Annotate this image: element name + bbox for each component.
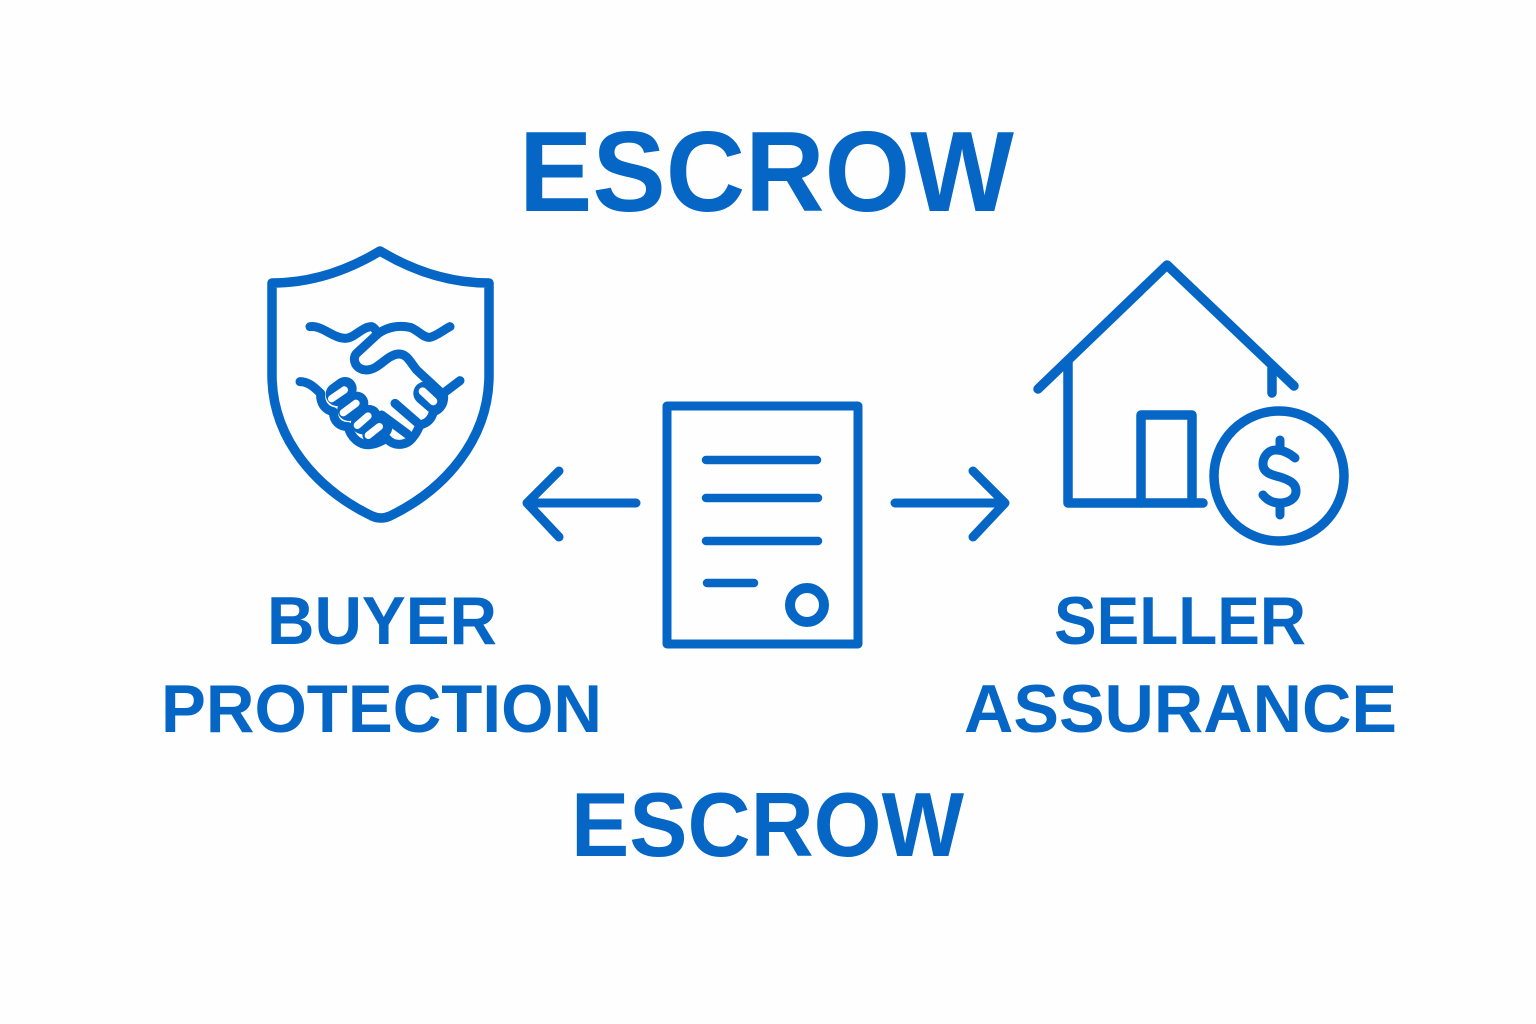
label: seller assurance: ASSURANCE (964, 671, 1397, 747)
icon: right arrow (895, 471, 1005, 537)
icon: shield with handshake (272, 251, 489, 518)
label: seller assurance: SELLER (1054, 583, 1306, 659)
icon: left arrow (527, 471, 636, 537)
icon: contract document (667, 406, 858, 644)
label: seller assurance (964, 583, 1397, 747)
title: ESCROW (519, 109, 1014, 236)
caption: ESCROW (571, 775, 964, 876)
label: buyer protection: BUYER (267, 583, 497, 659)
label: buyer protection: PROTECTION (161, 671, 602, 747)
icon: house with dollar coin (1038, 265, 1344, 541)
label: buyer protection (161, 583, 602, 747)
